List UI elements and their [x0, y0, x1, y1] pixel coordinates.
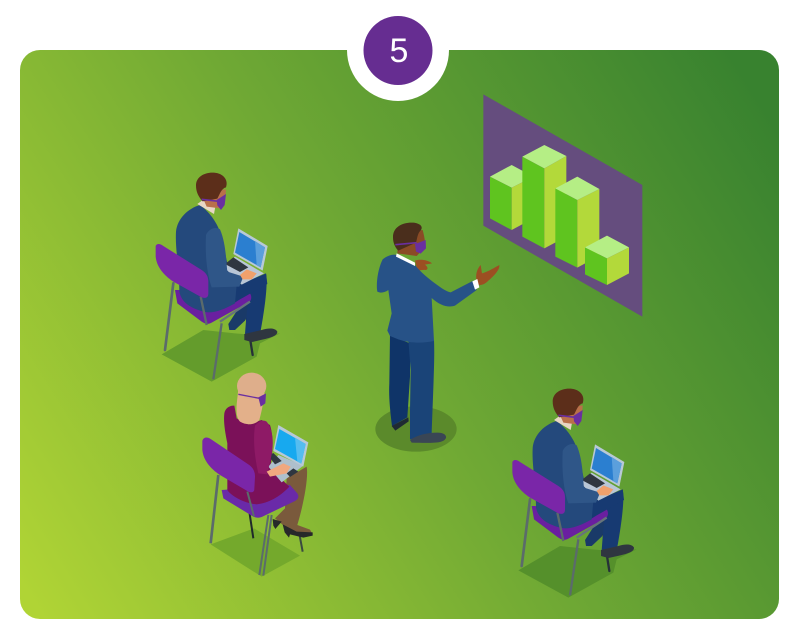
hand [597, 485, 613, 495]
presenter [375, 223, 499, 452]
woman hands [267, 463, 291, 477]
woman dress [224, 406, 289, 504]
chair floor shadow [518, 546, 637, 598]
bar 4 [585, 236, 629, 285]
chart purple board [483, 94, 642, 317]
bar 3 [555, 177, 599, 268]
woman chair seat [222, 485, 298, 518]
arm [562, 444, 600, 503]
chair backrest [512, 460, 565, 514]
step number: 5 [390, 32, 408, 70]
shin [245, 273, 267, 334]
laptop [223, 228, 268, 285]
badge purple circle [364, 16, 432, 85]
presenter jacket [377, 255, 477, 343]
woman chair shadow [211, 528, 300, 577]
bar 2 [522, 145, 566, 248]
woman head and shoulders [237, 373, 266, 424]
presenter shoes [392, 417, 446, 443]
seated man, bottom right [512, 389, 637, 598]
shoe [244, 329, 277, 342]
wall chart [483, 94, 642, 317]
far leg and foot [585, 516, 612, 546]
woman chair backrest [202, 437, 255, 492]
shoe [601, 545, 634, 558]
presenter collar [396, 253, 415, 266]
shin [602, 489, 623, 550]
chair seat [175, 290, 251, 324]
chair rear legs [522, 499, 609, 571]
chair front legs [201, 297, 222, 379]
chair front legs [557, 513, 578, 595]
chair seat frame [220, 302, 250, 322]
presenter floor shadow [375, 406, 457, 452]
seated woman [202, 373, 313, 577]
presenter cuff [472, 279, 479, 290]
woman chair rear legs [211, 475, 303, 552]
chair backrest [156, 244, 208, 298]
far leg and foot [228, 300, 255, 330]
hand [240, 269, 257, 279]
arm [206, 228, 243, 287]
chair seat frame [577, 518, 607, 538]
thigh [228, 273, 267, 307]
woman arm [254, 421, 273, 474]
step badge [347, 0, 449, 101]
presenter far hand [415, 260, 432, 271]
woman chair front legs [247, 492, 272, 576]
badge white notch [347, 0, 449, 101]
head [553, 389, 583, 430]
woman laptop [268, 425, 308, 482]
presenter head [393, 223, 426, 256]
chair floor shadow [162, 330, 280, 382]
laptop [580, 444, 624, 501]
presenter legs [389, 335, 434, 439]
head [196, 173, 227, 214]
bar 1 [490, 165, 533, 230]
woman legs [275, 467, 313, 536]
presenter near hand [476, 265, 499, 285]
woman shoes [273, 519, 313, 538]
seated man, top left [156, 173, 280, 382]
torso [533, 421, 593, 528]
torso [176, 205, 237, 312]
chair rear legs [165, 283, 253, 355]
chair seat [532, 506, 608, 540]
thigh [585, 489, 624, 523]
